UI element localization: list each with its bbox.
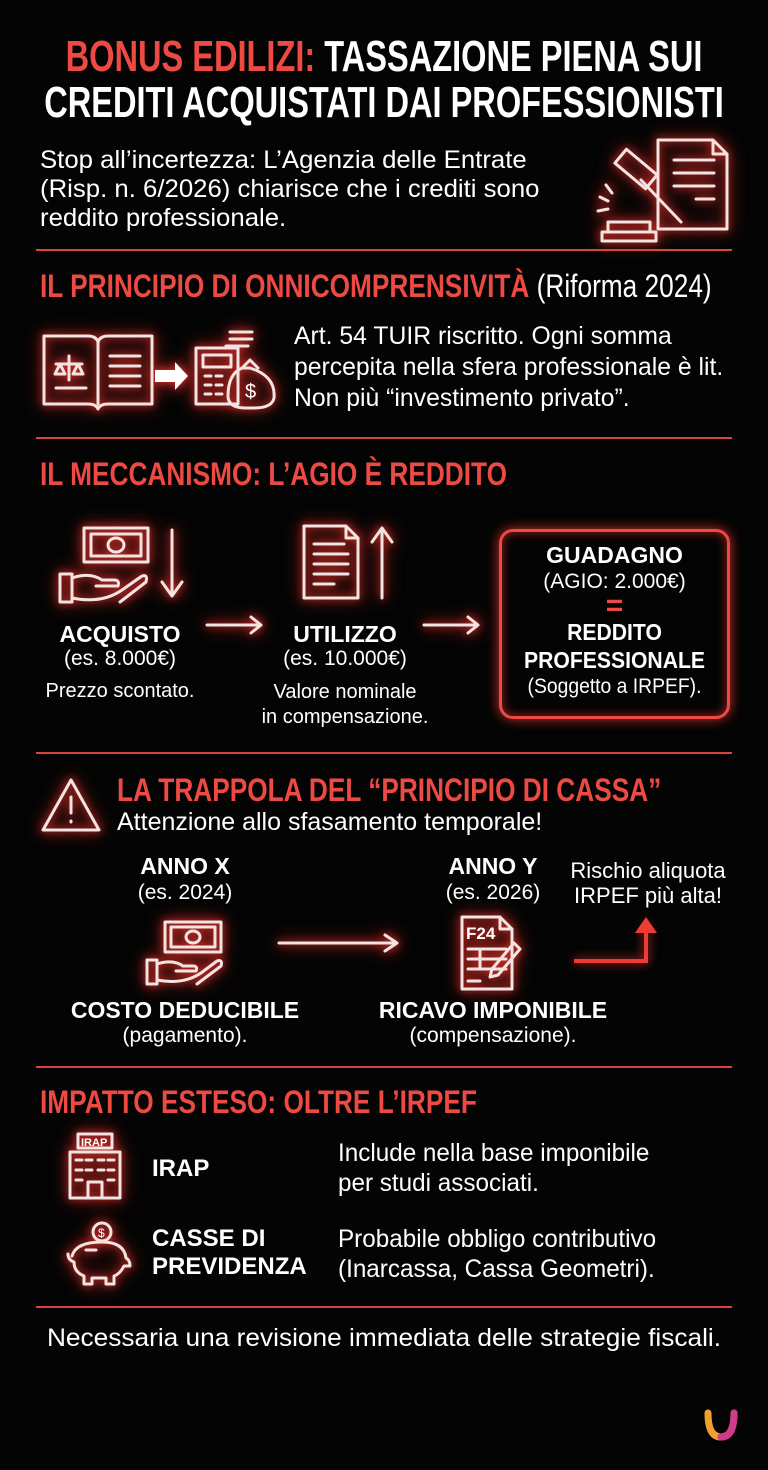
- step: acquisto: ACQUISTO: [60, 621, 180, 647]
- box: guadagno: GUADAGNO: [546, 542, 683, 568]
- heading: trappola: LA TRAPPOLA DEL “PRINCIPIO DI CASSA”: [117, 772, 661, 808]
- arrow: time: [271, 924, 408, 962]
- title: [44, 32, 724, 127]
- anno y: RICAVO IMPONIBILE: [379, 997, 607, 1023]
- icon: gavel and document: [589, 126, 741, 256]
- text: art 54: Non più “investimento privato”.: [294, 384, 630, 412]
- anno x: [71, 853, 299, 1047]
- title: CREDITI ACQUISTATI DAI PROFESSIONISTI: [44, 78, 724, 127]
- title: BONUS EDILIZI: TASSAZIONE PIENA SUI: [66, 32, 702, 81]
- step: utilizzo: UTILIZZO: [293, 621, 397, 647]
- row: casse: [57, 1211, 656, 1297]
- intro text: (Risp. n. 6/2026) chiarisce che i crediti sono: [40, 175, 540, 203]
- callout: rischio: [570, 858, 726, 908]
- icon: book to calculator/money: $: [245, 381, 256, 403]
- intro text: reddito professionale.: [40, 204, 286, 232]
- box: guadagno: =: [606, 589, 623, 622]
- intro text: [40, 146, 540, 232]
- anno x: ANNO X: [140, 853, 230, 879]
- row: irap: [56, 1120, 649, 1212]
- anno y: (es. 2026): [446, 881, 540, 904]
- arrow: [416, 607, 488, 643]
- callout: rischio: IRPEF più alta!: [574, 883, 722, 908]
- heading: impatto: IMPATTO ESTESO: OLTRE L’IRPEF: [40, 1084, 477, 1120]
- footer text: Necessaria una revisione immediata delle strategie fiscali.: [47, 1324, 721, 1352]
- anno x: (pagamento).: [123, 1024, 247, 1047]
- step: utilizzo: [262, 512, 428, 728]
- box: guadagno: (AGIO: 2.000€): [543, 570, 686, 593]
- row: casse: CASSE DI: [152, 1225, 265, 1252]
- anno y: [379, 853, 607, 1047]
- box: guadagno: (Soggetto a IRPEF).: [528, 675, 701, 698]
- intro text: Stop all’incertezza: L’Agenzia delle Entrate: [40, 146, 527, 174]
- row: irap: Include nella base imponibile: [338, 1139, 649, 1167]
- arrow: [199, 607, 272, 643]
- callout: rischio: Rischio aliquota: [570, 858, 726, 883]
- row: casse: Probabile obbligo contributivo: [338, 1225, 656, 1253]
- anno y: ANNO Y: [448, 853, 538, 879]
- subheading: Attenzione allo sfasamento temporale!: [117, 808, 542, 836]
- heading: meccanismo: IL MECCANISMO: L’AGIO È REDDITO: [40, 456, 507, 492]
- icon: warning: [32, 770, 110, 844]
- anno x: COSTO DEDUCIBILE: [71, 997, 299, 1023]
- step: utilizzo: Valore nominale: [273, 681, 417, 703]
- text: art 54: percepita nella sfera professionale è lit.: [294, 353, 723, 381]
- anno y: (compensazione).: [410, 1024, 576, 1047]
- step: utilizzo: (es. 10.000€): [283, 647, 407, 670]
- row: casse: $: [98, 1226, 105, 1240]
- row: irap: IRAP: [81, 1137, 107, 1149]
- arrow: up: [568, 917, 657, 971]
- box: guadagno: REDDITO: [567, 619, 662, 645]
- text: art 54: Art. 54 TUIR riscritto. Ogni somma: [294, 322, 672, 350]
- logo: [704, 1410, 738, 1440]
- step: acquisto: (es. 8.000€): [64, 647, 176, 670]
- row: irap: per studi associati.: [338, 1169, 539, 1197]
- anno y: F24: [466, 924, 496, 943]
- step: utilizzo: in compensazione.: [262, 706, 428, 728]
- box: guadagno: [499, 529, 730, 719]
- anno x: (es. 2024): [138, 881, 232, 904]
- icon: book to calculator/money: [30, 318, 287, 422]
- text: art 54: [294, 322, 723, 412]
- row: casse: PREVIDENZA: [152, 1253, 307, 1280]
- step: acquisto: [46, 514, 194, 702]
- heading: onnicomprensivita: IL PRINCIPIO DI ONNICOMPRENSIVITÀ (Riforma 2024): [40, 268, 712, 304]
- box: guadagno: PROFESSIONALE: [524, 647, 705, 673]
- step: acquisto: Prezzo scontato.: [46, 680, 194, 702]
- row: casse: (Inarcassa, Cassa Geometri).: [338, 1255, 655, 1283]
- row: irap: IRAP: [152, 1155, 209, 1182]
